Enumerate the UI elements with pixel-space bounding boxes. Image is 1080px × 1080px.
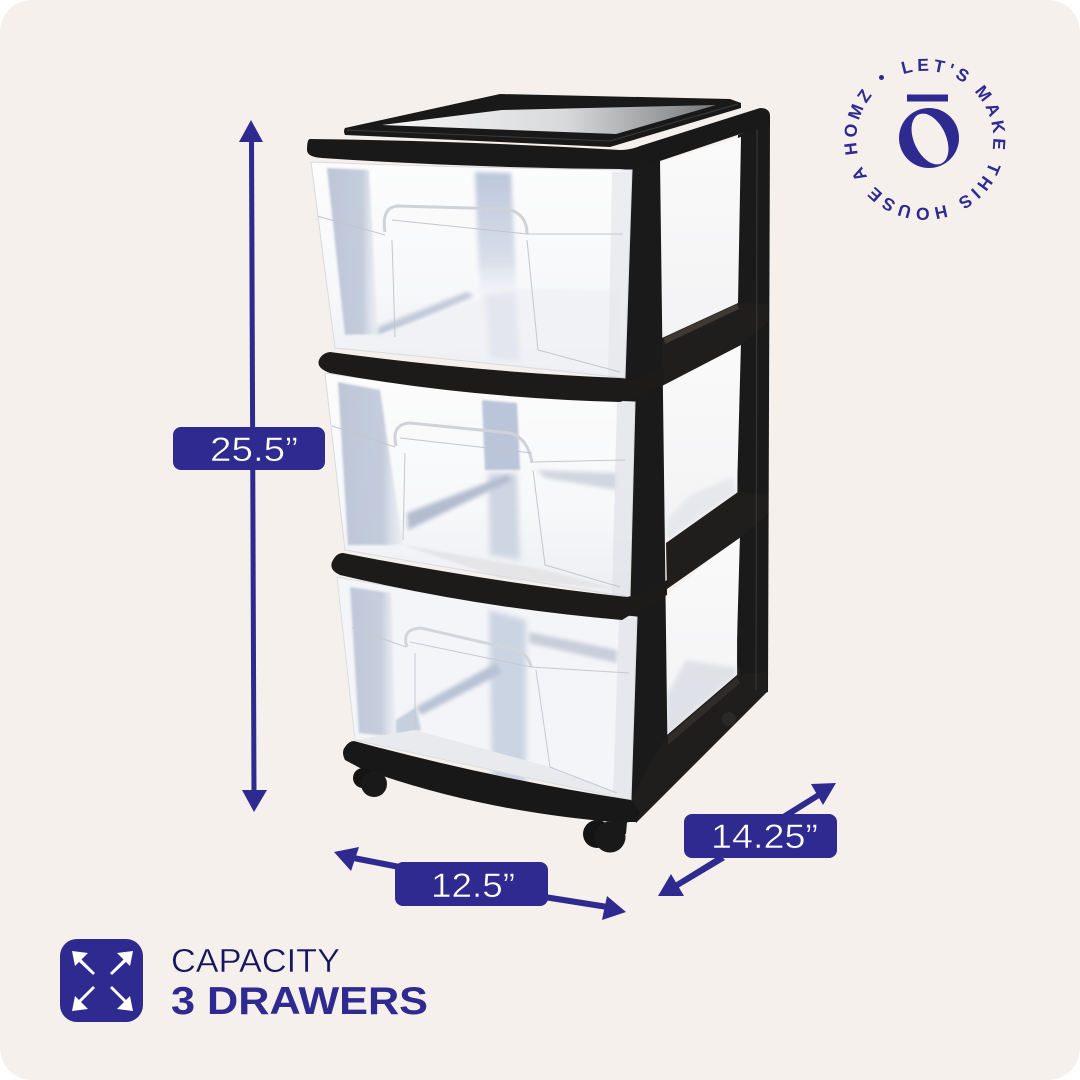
drawer 3 handle and front pocket	[337, 577, 637, 800]
side panels	[660, 137, 741, 735]
depth label	[684, 814, 837, 858]
width label	[395, 862, 548, 906]
drawer 1 handle and front pocket	[311, 162, 632, 378]
drawer 2	[325, 373, 635, 597]
base rail	[343, 741, 640, 823]
product: three drawer storage cart	[307, 94, 770, 852]
side shelf rails and base	[630, 303, 768, 823]
depth dimension: 14.25 inches	[658, 783, 837, 896]
icon: expand arrows	[60, 939, 143, 1022]
brand badge	[844, 58, 1006, 220]
width arrow	[334, 847, 626, 920]
front wheel	[583, 820, 627, 852]
wheels	[353, 712, 736, 852]
drawer 3	[337, 577, 637, 800]
depth arrow	[658, 783, 836, 896]
rear post ridge	[756, 130, 757, 690]
badge logo mark	[899, 94, 959, 170]
height arrow	[239, 120, 267, 812]
depth label: 14.25”	[711, 818, 818, 856]
capacity value: 3 DRAWERS	[171, 980, 428, 1023]
drawer 1 interior shadows	[327, 168, 632, 378]
drawer rail 2	[318, 352, 664, 402]
badge dot	[879, 75, 884, 80]
drawer 2 interior shadows	[338, 382, 635, 597]
drawer rail 3	[331, 553, 667, 620]
front frame post	[622, 160, 668, 822]
width dimension: 12.5 inches	[334, 847, 626, 920]
rear frame post	[737, 122, 770, 700]
capacity block	[60, 939, 428, 1023]
drawer 3 interior shadows	[350, 587, 637, 800]
height dimension: 25.5 inches	[173, 120, 325, 812]
drawer 1	[311, 162, 632, 378]
lid tray	[344, 94, 741, 147]
top rim	[307, 108, 770, 169]
height label	[173, 427, 325, 470]
left wheel	[353, 768, 387, 797]
badge circular tagline: LET'S MAKE THIS HOUSE A HOMZ	[844, 58, 1006, 220]
capacity label: CAPACITY	[171, 942, 340, 979]
rear wheel	[722, 712, 736, 726]
width label: 12.5”	[431, 867, 515, 905]
height label: 25.5”	[210, 431, 298, 469]
drawer 2 handle and front pocket	[325, 373, 635, 597]
